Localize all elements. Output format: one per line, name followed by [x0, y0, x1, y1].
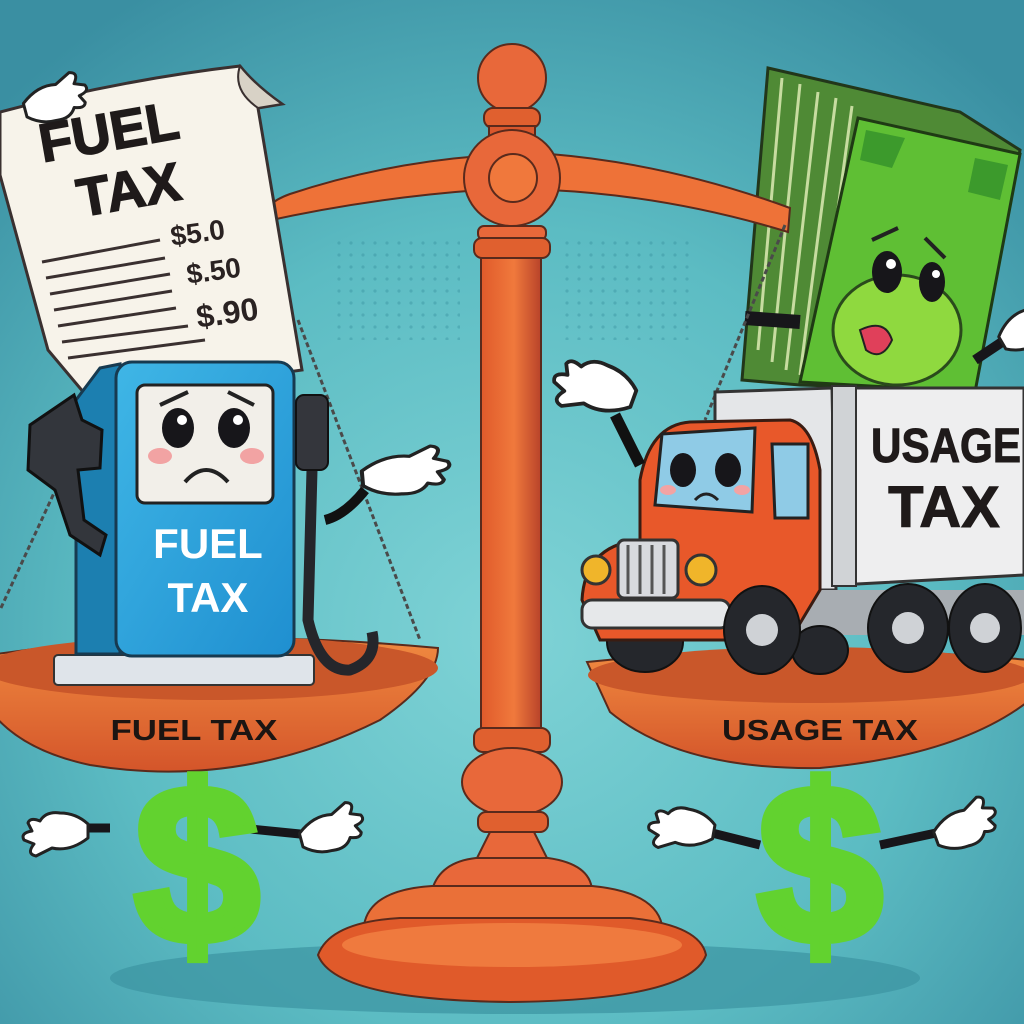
pump face	[162, 408, 194, 448]
lower collar	[474, 728, 550, 752]
fuel pump character	[28, 362, 452, 685]
receipt: fuel tax bill: $.50	[185, 252, 243, 290]
right pan	[587, 647, 1024, 768]
truck box	[715, 388, 836, 590]
money arms	[745, 318, 800, 322]
hubcaps	[746, 612, 1000, 646]
right dollar character: $	[758, 740, 882, 990]
rear wheels	[607, 584, 1021, 674]
hub	[489, 126, 535, 140]
money face	[872, 251, 902, 293]
right pan: USAGE TAX	[722, 715, 919, 747]
top finial	[478, 44, 546, 112]
left dollar character	[23, 740, 369, 990]
left dollar character: $	[135, 740, 259, 990]
chains	[0, 225, 785, 640]
pole	[481, 255, 541, 735]
receipt: fuel tax bill: TAX	[72, 152, 185, 229]
truck character: TAX	[888, 475, 1000, 540]
front wheel	[724, 586, 800, 674]
beam	[262, 156, 480, 222]
base tiers	[432, 858, 592, 890]
pump hand	[325, 490, 365, 520]
receipt: fuel tax bill	[0, 66, 302, 400]
receipt prices: $5.0	[169, 214, 227, 252]
truck face	[670, 453, 696, 487]
left pan: FUEL TAX	[110, 715, 278, 747]
scale stand	[262, 44, 790, 1002]
bumper	[582, 600, 730, 628]
truck hand	[615, 415, 640, 465]
hose	[308, 470, 373, 670]
left pan	[0, 636, 438, 772]
nozzle	[28, 395, 106, 555]
receipt: fuel tax bill: $.90	[194, 291, 261, 335]
receipt lines	[42, 240, 205, 358]
fuel pump character: TAX	[168, 574, 248, 621]
dotted backdrop texture	[330, 240, 690, 340]
grille	[618, 540, 678, 598]
receipt heading: FUEL	[34, 90, 184, 174]
hand holding receipt	[19, 69, 93, 128]
pump label: FUEL	[153, 520, 263, 567]
right dollar character	[645, 740, 1003, 990]
truck character	[546, 349, 1024, 674]
money stack character	[742, 68, 1024, 392]
ground shadow	[110, 942, 920, 1014]
chassis	[800, 590, 1024, 635]
truck cab	[582, 420, 820, 640]
